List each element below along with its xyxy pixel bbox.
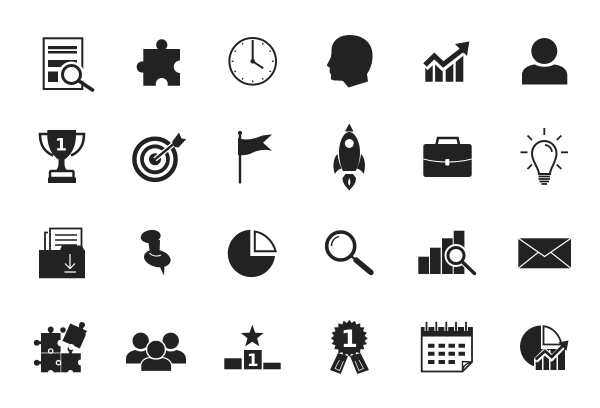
icon: target with dart xyxy=(134,132,186,180)
icon: document with magnifier xyxy=(44,38,92,90)
icon: rocket xyxy=(334,124,365,190)
trophy number: 1 xyxy=(55,136,67,156)
icon: award badge xyxy=(330,320,369,374)
icon: jigsaw puzzle group xyxy=(34,322,92,376)
icon: calendar xyxy=(421,322,472,372)
podium number: 1 xyxy=(247,351,259,370)
badge number: 1 xyxy=(341,325,358,353)
icon: push pin xyxy=(140,229,172,276)
icon: pie chart xyxy=(228,230,276,277)
icon: wall clock xyxy=(229,38,276,85)
icon: folder with download xyxy=(39,228,85,278)
icon: user silhouette xyxy=(522,38,567,84)
icon: bars with magnifier xyxy=(418,231,475,274)
icon: trophy xyxy=(40,130,84,183)
icon: podium with star xyxy=(224,325,281,370)
icon: briefcase xyxy=(423,138,472,177)
icon: flag on pole xyxy=(238,131,272,184)
icon: envelope xyxy=(518,238,571,268)
icon: puzzle piece xyxy=(137,39,180,86)
icon: light bulb xyxy=(520,128,568,184)
icon: magnifying glass xyxy=(327,232,371,272)
icon: group of people xyxy=(126,333,186,372)
icon: human head profile xyxy=(327,35,373,88)
icon: growth chart with arrow xyxy=(425,42,469,82)
icon: pie chart with growth arrow xyxy=(520,326,568,372)
